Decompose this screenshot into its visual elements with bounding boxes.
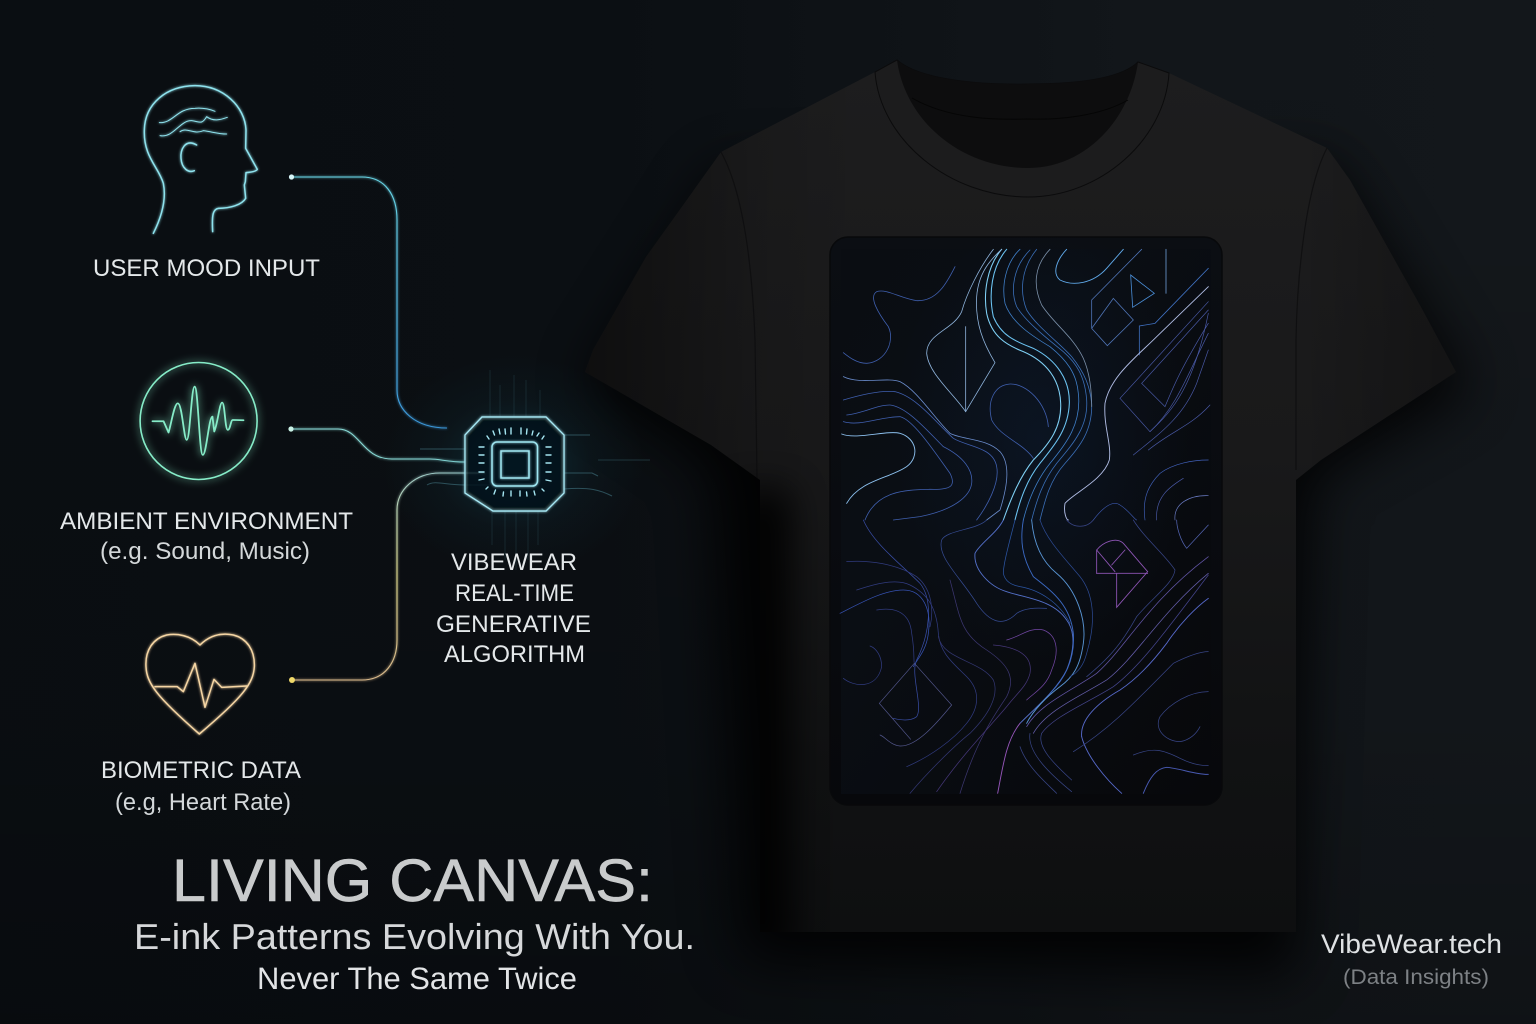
subtitle line: E-ink Patterns Evolving With You.: [134, 916, 695, 957]
tagline: Never The Same Twice: [257, 961, 577, 996]
display surface: [830, 237, 1222, 805]
lower right bundle: [1020, 520, 1208, 793]
brand note: (Data Insights): [1343, 966, 1489, 989]
brand: [1321, 929, 1502, 989]
label: algorithm: ALGORITHM: [444, 641, 585, 668]
shirt shading: [585, 242, 798, 932]
circuit traces: [420, 370, 650, 570]
arrow: biometric to algorithm: [289, 473, 485, 683]
topographic pattern: upper half: [842, 249, 1210, 520]
label: ambient environment: AMBIENT ENVIRONMENT: [60, 508, 353, 535]
upper geometric shapes: [1056, 249, 1208, 520]
upper river strands: [985, 249, 1092, 520]
main heading: LIVING CANVAS:: [172, 847, 653, 914]
pattern glow: [972, 340, 1110, 542]
panel: e-ink display: [830, 220, 1222, 805]
back collar seam: [912, 98, 1128, 119]
brand name: VibeWear.tech: [1321, 929, 1502, 959]
label: ambient environment: [60, 508, 353, 565]
neck opening: [897, 60, 1138, 168]
chip outline: [465, 417, 564, 511]
label: user mood input: USER MOOD INPUT: [93, 255, 320, 282]
arrow: mood to algorithm: [289, 174, 447, 428]
t-shirt: [585, 60, 1470, 975]
label: algorithm: GENERATIVE: [436, 611, 591, 638]
lower left diamond: [879, 663, 952, 746]
label: algorithm: [436, 549, 591, 668]
shirt drop shadow: [585, 160, 1470, 975]
title: [134, 847, 695, 996]
lower river strands: [975, 520, 1092, 793]
label: algorithm: VIBEWEAR: [451, 549, 577, 576]
artwork field: [841, 249, 1211, 794]
label: algorithm: REAL-TIME: [455, 580, 574, 607]
chip glow: [384, 354, 644, 574]
icon: heart with pulse: [146, 634, 254, 734]
label: biometric data: (e.g, Heart Rate): [115, 789, 291, 816]
shirt body and sleeves: [585, 60, 1456, 932]
chip ticks: [479, 428, 551, 496]
icon: sound wave circle: [140, 362, 257, 480]
topographic pattern: lower half: [840, 520, 1208, 793]
collar: [875, 60, 1169, 197]
label: ambient environment: (e.g. Sound, Music): [100, 538, 310, 565]
right diagonal bundle: [1093, 302, 1210, 520]
diamond form: [927, 249, 1002, 412]
icon: processor chip: [384, 354, 650, 574]
purple geometric shape: [1097, 540, 1148, 607]
arrow: environment to algorithm: [288, 426, 465, 462]
label: biometric data: BIOMETRIC DATA: [101, 757, 301, 784]
left contours: [842, 267, 1048, 520]
chip core: [492, 442, 538, 486]
label: biometric data: [101, 757, 301, 816]
sleeve seams: [721, 148, 1327, 478]
icon: head with waves: [144, 86, 257, 233]
lower left contours: [840, 520, 1056, 793]
